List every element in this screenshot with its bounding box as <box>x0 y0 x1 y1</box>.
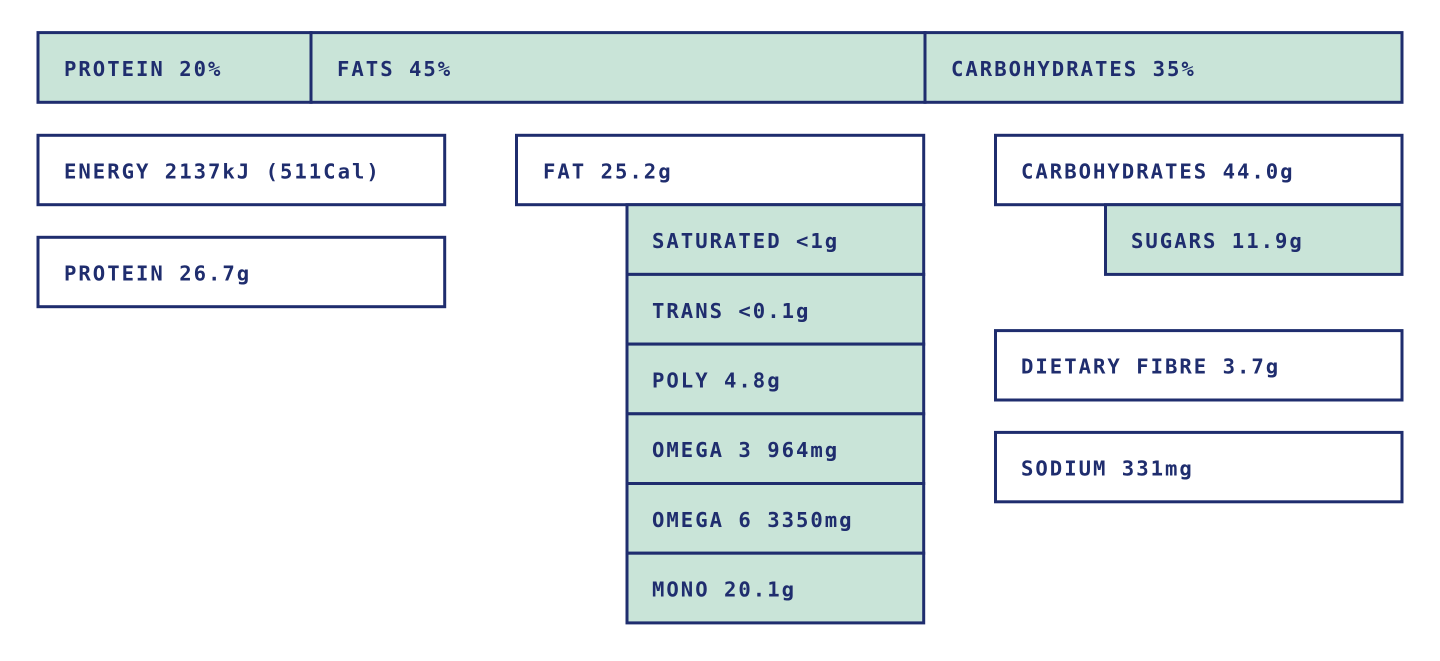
segment: protein 20% <box>38 33 311 102</box>
box: carbohydrates <box>996 135 1402 205</box>
box: protein <box>38 237 445 307</box>
row: trans <box>627 274 924 344</box>
row: trans: TRANS <0.1g <box>652 299 810 323</box>
row: sugars <box>1106 205 1402 274</box>
segment: carbohydrates 35%: CARBOHYDRATES 35% <box>951 57 1196 81</box>
row: omega 3: OMEGA 3 964mg <box>652 438 839 462</box>
column: fat breakdown <box>516 135 924 623</box>
row: mono: MONO 20.1g <box>652 578 796 602</box>
row: saturated: SATURATED <1g <box>652 229 839 253</box>
row: omega 6: OMEGA 6 3350mg <box>652 508 854 532</box>
box: energy <box>38 135 445 205</box>
segment: carbohydrates 35% <box>925 33 1402 102</box>
row: sugars: SUGARS 11.9g <box>1131 229 1304 253</box>
row: omega 3 <box>627 414 924 484</box>
column: energy and protein <box>38 135 445 307</box>
row: omega 6 <box>627 484 924 553</box>
segment: fats 45%: FATS 45% <box>337 57 452 81</box>
row: poly: POLY 4.8g <box>652 368 782 392</box>
row: mono <box>627 553 924 623</box>
box: dietary fibre <box>996 331 1402 400</box>
box: sodium: SODIUM 331mg <box>1021 457 1194 481</box>
row: poly <box>627 344 924 414</box>
row: saturated <box>627 205 924 274</box>
box: protein: PROTEIN 26.7g <box>64 262 251 286</box>
macronutrient percentage bar <box>38 33 1402 102</box>
box: energy: ENERGY 2137kJ (511Cal) <box>64 160 381 184</box>
box: sodium <box>996 432 1402 502</box>
box: fat total <box>516 135 924 205</box>
box: dietary fibre: DIETARY FIBRE 3.7g <box>1021 355 1280 379</box>
box: fat total: FAT 25.2g <box>543 160 673 184</box>
segment: fats 45% <box>311 33 925 102</box>
segment: protein 20%: PROTEIN 20% <box>64 57 222 81</box>
box: carbohydrates: CARBOHYDRATES 44.0g <box>1021 160 1295 184</box>
column: carbohydrates, fibre and sodium <box>996 135 1402 502</box>
